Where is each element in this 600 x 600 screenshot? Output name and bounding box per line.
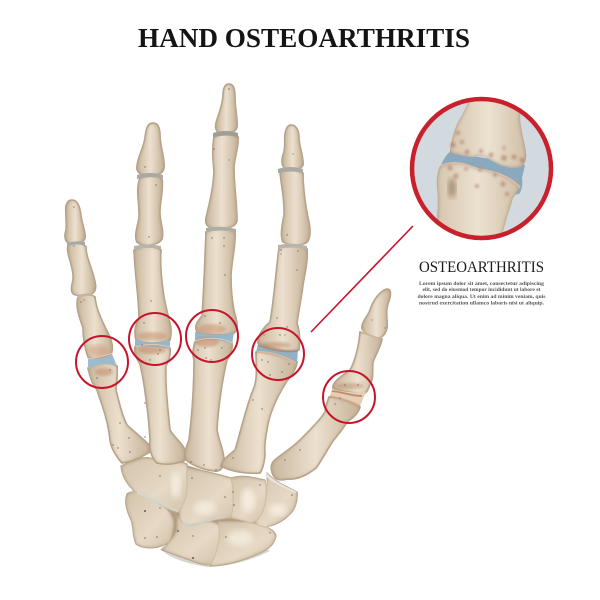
joint damage: thumb [330, 383, 366, 406]
finger: middle [185, 84, 238, 471]
osteoarthritis text block [418, 259, 546, 306]
magnified joint inset [412, 95, 551, 245]
inset lower bone [436, 164, 520, 236]
heading: OSTEOARTHRITIS [419, 259, 544, 276]
leader line [311, 226, 413, 332]
joint damage: index finger [256, 342, 298, 363]
inset upper bone [450, 95, 526, 168]
finger: thumb [271, 289, 390, 480]
finger: little [65, 200, 150, 463]
bone surface dots [73, 88, 386, 559]
body copy: nostrud exercitation ullamco laboris nisi ut aliquip. [419, 300, 545, 306]
joint damage: ring finger [135, 332, 170, 354]
title: HAND OSTEOARTHRITIS [138, 23, 470, 53]
body copy [418, 281, 546, 306]
finger: ring [134, 123, 185, 464]
carpal bones [121, 458, 297, 567]
hand skeleton [65, 84, 391, 567]
inset cartilage [438, 152, 525, 195]
joint damage: middle finger [195, 324, 234, 347]
body copy: Lorem ipsum dolor sit amet, consectetur adipiscing [419, 281, 544, 287]
joint damage: little finger [87, 345, 117, 376]
body copy: elit, sed do eiusmod tempor incididunt ut labore et [422, 287, 541, 293]
body copy: dolore magna aliqua. Ut enim ad minim veniam, quis [418, 294, 546, 300]
finger: index [221, 125, 310, 473]
red highlight circles [76, 310, 375, 423]
